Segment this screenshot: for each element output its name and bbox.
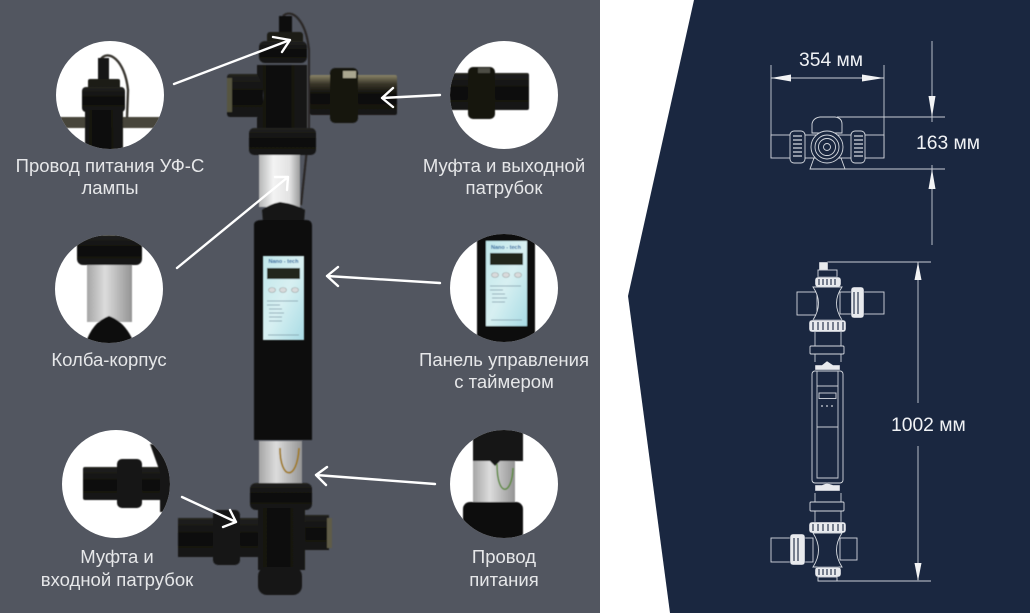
panel: navy dimensions background xyxy=(628,0,1030,613)
upper tube xyxy=(815,332,841,362)
clamp xyxy=(262,202,305,222)
circle: power cable closeup xyxy=(56,41,164,150)
top section xyxy=(797,262,884,332)
lower left pipe xyxy=(178,510,260,565)
product control panel xyxy=(263,256,304,340)
arrow: to inlet coupling xyxy=(182,497,236,527)
label: power wire: Провод xyxy=(472,546,536,567)
arrow: to outlet coupling xyxy=(382,88,440,107)
cable xyxy=(283,14,309,205)
display xyxy=(267,268,300,279)
drawing: top view dimension 354 mm xyxy=(771,50,884,158)
lower right pipe xyxy=(300,515,332,550)
label: power cable: лампы xyxy=(81,177,139,198)
value: 354 мм xyxy=(799,50,863,71)
right outlet pipe with union xyxy=(310,68,397,123)
label: flask body: Колба-корпус xyxy=(51,349,167,370)
arrow: to control panel xyxy=(327,267,440,286)
label: power wire: питания xyxy=(469,569,539,590)
arrow: to power wire xyxy=(316,467,435,485)
buttons xyxy=(268,288,298,292)
arrow: to power cable xyxy=(174,37,290,84)
circle: flask body closeup xyxy=(55,235,163,345)
value: 1002 мм xyxy=(891,415,966,436)
arrowheads xyxy=(914,262,922,581)
label: outlet coupling: патрубок xyxy=(466,177,543,198)
lower collar xyxy=(250,483,312,510)
circle: control panel closeup: Nano - tech xyxy=(491,245,522,251)
left outlet xyxy=(227,74,263,117)
circle: inlet coupling closeup xyxy=(62,430,173,538)
lower tube xyxy=(815,483,840,491)
circle: outlet coupling closeup xyxy=(448,41,558,149)
label: control panel: с таймером xyxy=(454,371,554,392)
arrowheads xyxy=(928,96,936,189)
circle: control panel closeup xyxy=(450,232,558,344)
brand: Nano - tech xyxy=(269,259,299,265)
control box xyxy=(254,220,312,440)
drawing: top view dimension 163 mm xyxy=(811,41,980,245)
label: outlet coupling: Муфта и выходной xyxy=(423,155,585,176)
label: power cable: Провод питания УФ-С xyxy=(16,155,204,176)
bottom section xyxy=(771,522,857,581)
lower body xyxy=(258,508,305,570)
drawing: top view of device xyxy=(771,117,884,169)
circle: power wire closeup xyxy=(450,428,558,540)
label: inlet coupling: Муфта и xyxy=(80,546,154,567)
lower cap xyxy=(258,567,302,595)
arrow: to flask xyxy=(177,177,288,268)
lower tube xyxy=(259,441,302,493)
label: inlet coupling: входной патрубок xyxy=(41,569,194,590)
panel: grey product background xyxy=(0,0,600,613)
drawing: side view dimension 1002 mm xyxy=(818,262,966,581)
upper body xyxy=(257,65,307,135)
upper collar xyxy=(249,128,316,155)
top cap xyxy=(259,16,307,63)
control box xyxy=(812,371,843,483)
panel text lines xyxy=(267,301,299,335)
label: control panel: Панель управления xyxy=(419,349,589,370)
upper tube xyxy=(259,155,300,207)
product photo: UV lamp unit xyxy=(178,14,397,595)
arrowheads xyxy=(771,74,884,82)
drawing: side view of device xyxy=(771,262,884,581)
value: 163 мм xyxy=(916,133,980,154)
wire xyxy=(280,448,299,473)
